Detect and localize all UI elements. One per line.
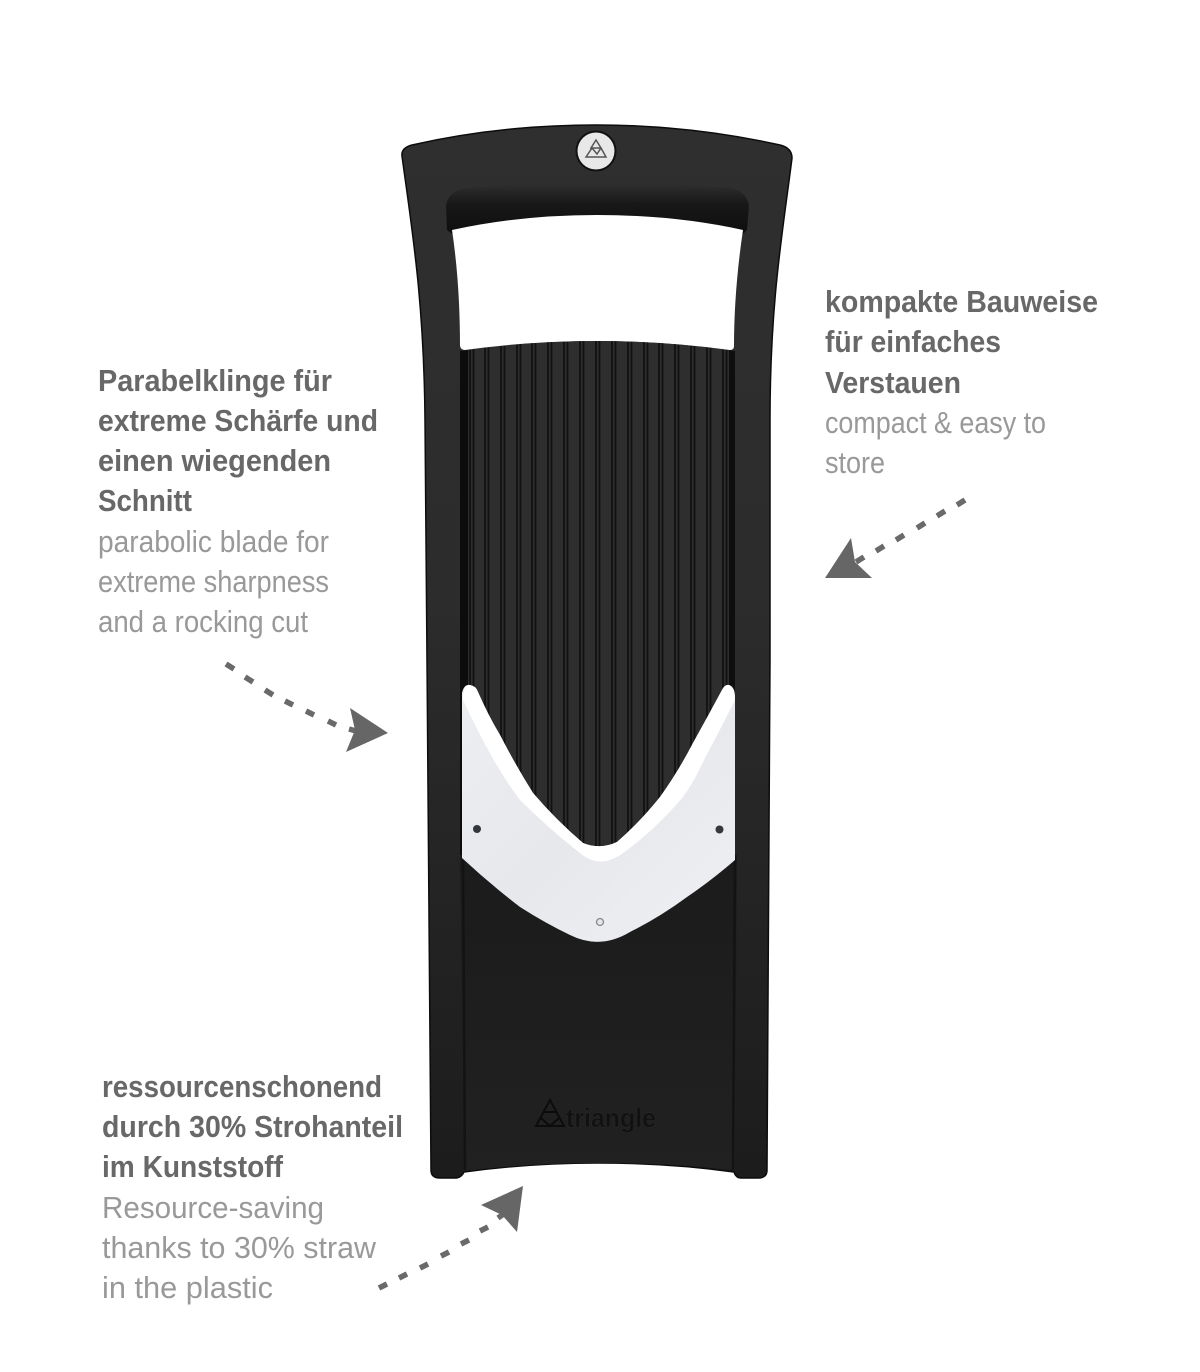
text block: resource saving bbox=[102, 1069, 403, 1305]
heading: Parabelklinge: Schnitt bbox=[98, 483, 192, 518]
translation: resource-saving: in the plastic bbox=[102, 1270, 273, 1305]
text block: compact storage bbox=[825, 284, 1098, 480]
translation: compact and easy to store bbox=[825, 405, 1046, 480]
handle grip shadow bbox=[446, 183, 749, 234]
slicer body frame bbox=[402, 125, 792, 1178]
lower panel bbox=[460, 855, 737, 1171]
heading: kompakte Bauweise: Verstauen bbox=[825, 365, 961, 400]
heading: ressourcenschonend: im Kunststoff bbox=[102, 1149, 284, 1184]
translation: compact and easy to store: store bbox=[825, 445, 885, 480]
blade screws bbox=[473, 825, 724, 926]
translation: resource-saving bbox=[102, 1190, 377, 1305]
translation: parabolic blade: and a rocking cut bbox=[98, 604, 308, 639]
translation: parabolic blade: extreme sharpness bbox=[98, 564, 329, 599]
arrow: straw plastic callout bbox=[379, 1186, 523, 1288]
heading: ressourcenschonend: durch 30% Strohanteil bbox=[102, 1109, 403, 1144]
translation: resource-saving: Resource-saving bbox=[102, 1190, 324, 1225]
text block: parabolic blade bbox=[98, 363, 378, 639]
ribbed cutting surface bbox=[458, 340, 738, 870]
heading: kompakte Bauweise bbox=[825, 284, 1098, 400]
heading: kompakte Bauweise: kompakte Bauweise bbox=[825, 284, 1098, 319]
heading: ressourcenschonend: ressourcenschonend bbox=[102, 1069, 382, 1104]
translation: resource-saving: thanks to 30% straw bbox=[102, 1230, 377, 1265]
heading: kompakte Bauweise: für einfaches bbox=[825, 324, 1001, 359]
arrow: blade callout bbox=[226, 664, 388, 752]
embossed brand mark bbox=[536, 1100, 656, 1133]
arrow: compact callout bbox=[825, 500, 965, 578]
translation: compact and easy to store: compact & easy to bbox=[825, 405, 1046, 440]
product: triangle slicer bbox=[402, 125, 792, 1178]
heading: Parabelklinge bbox=[98, 363, 378, 518]
translation: parabolic blade: parabolic blade for bbox=[98, 524, 329, 559]
heading: Parabelklinge: extreme Schärfe und bbox=[98, 403, 378, 438]
V blade bbox=[462, 685, 735, 942]
heading: Parabelklinge: einen wiegenden bbox=[98, 443, 331, 478]
handle opening bbox=[452, 215, 743, 350]
translation: parabolic blade bbox=[98, 524, 329, 639]
badge logo bbox=[576, 130, 616, 172]
heading: ressourcenschonend bbox=[102, 1069, 403, 1184]
embossed brand mark: triangle bbox=[566, 1103, 656, 1133]
blade edge highlight bbox=[463, 685, 735, 862]
heading: Parabelklinge: Parabelklinge für bbox=[98, 363, 332, 398]
